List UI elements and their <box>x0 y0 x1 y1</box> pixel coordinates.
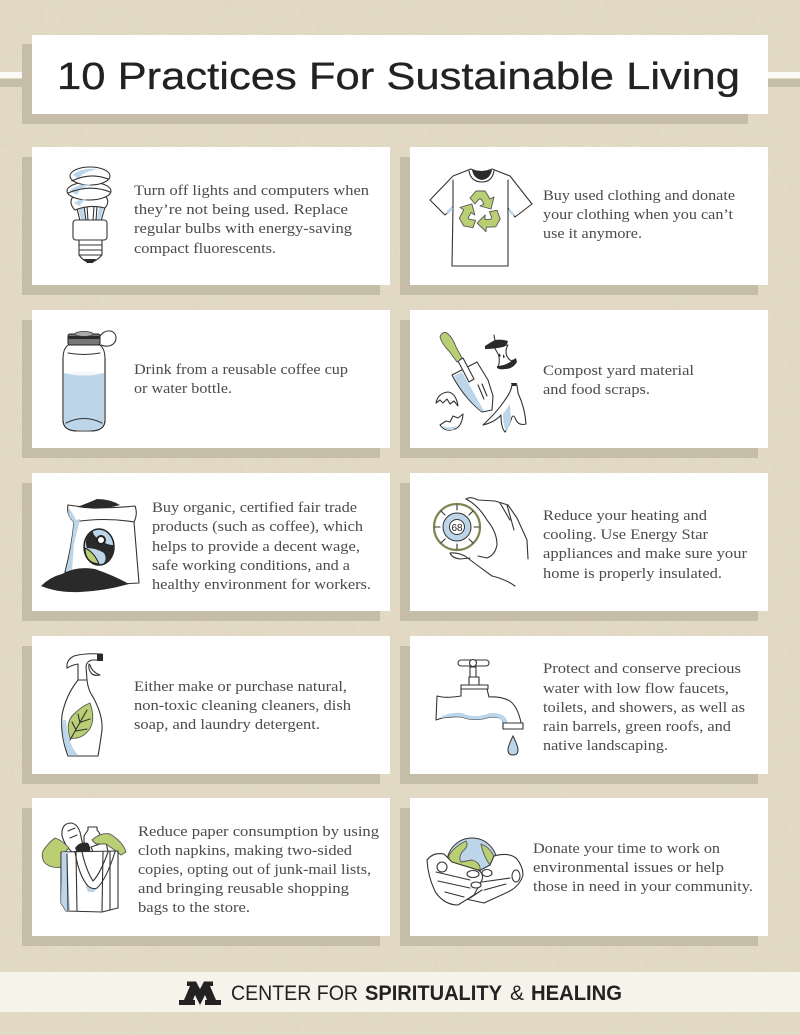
panel: reduce paper <box>22 798 390 946</box>
text: donate: environmental issues or help <box>533 860 724 876</box>
icon: fair trade coffee sack <box>41 499 139 592</box>
text: lights: compact fluorescents. <box>134 241 276 257</box>
panel: lights <box>22 147 390 295</box>
panel: organic fair trade <box>22 473 390 621</box>
icon: hand turning thermostat <box>434 498 528 586</box>
text: clothing: Buy used clothing and donate <box>543 188 735 204</box>
text: paper <box>138 824 380 916</box>
panel: heating and cooling <box>400 473 768 621</box>
text: paper: and bringing reusable shopping <box>138 881 350 897</box>
text: heating: cooling. Use Energy Star <box>543 527 708 543</box>
icon: hands holding earth <box>427 838 523 905</box>
text: paper: copies, opting out of junk-mail lists, <box>138 862 371 878</box>
text: lights <box>134 183 370 257</box>
text: water: toilets, and showers, as well as <box>543 700 745 716</box>
panel: natural cleaners <box>22 636 390 784</box>
text: compost: and food scraps. <box>543 382 650 398</box>
panel: reusable bottle <box>22 310 390 458</box>
icon: water bottle <box>63 331 116 431</box>
footer wordmark <box>231 982 622 1005</box>
text: organic fair trade: helps to provide a decent wage, <box>152 539 360 555</box>
text: heating <box>543 508 747 582</box>
text: organic fair trade: products (such as coffee), which <box>152 519 364 535</box>
footer wordmark: CENTER FOR <box>231 982 358 1005</box>
text: bottle: Drink from a reusable coffee cup <box>134 362 348 378</box>
icon: hand turning thermostat: 68 <box>451 523 463 534</box>
text: heating: home is properly insulated. <box>543 566 722 582</box>
panel: compost <box>400 310 768 458</box>
title: 10 Practices For Sustainable Living <box>57 56 740 98</box>
title banner <box>0 35 800 124</box>
text: donate: Donate your time to work on <box>533 841 721 857</box>
text: organic fair trade: safe working conditions, and a <box>152 558 350 574</box>
text: paper: cloth napkins, making two-sided <box>138 843 353 859</box>
text: water: native landscaping. <box>543 738 668 754</box>
text: lights: Turn off lights and computers when <box>134 183 370 199</box>
icon: spray bottle with leaf <box>62 654 103 756</box>
text: bottle: or water bottle. <box>134 381 232 397</box>
text: donate <box>533 841 753 895</box>
text: donate: those in need in your community. <box>533 879 753 895</box>
text: compost: Compost yard material <box>543 363 694 379</box>
text: lights: regular bulbs with energy-saving <box>134 221 353 237</box>
text: clothing: your clothing when you can’t <box>543 207 734 223</box>
text: cleaners: non-toxic cleaning cleaners, dish <box>134 698 352 714</box>
text: bottle <box>134 362 348 397</box>
text: organic fair trade: healthy environment for workers. <box>152 577 371 593</box>
icon: light bulb <box>67 167 111 263</box>
footer wordmark: & <box>510 982 524 1005</box>
footer band <box>0 972 800 1012</box>
text: water <box>543 661 745 754</box>
panel: water conservation <box>400 636 768 784</box>
panel: clothing <box>400 147 768 295</box>
text: heating: appliances and make sure your <box>543 546 747 562</box>
text: organic fair trade: Buy organic, certified fair trade <box>152 500 357 516</box>
text: water: rain barrels, green roofs, and <box>543 719 732 735</box>
text: cleaners: soap, and laundry detergent. <box>134 717 320 733</box>
text: clothing: use it anymore. <box>543 226 642 242</box>
text: organic fair trade <box>152 500 371 593</box>
footer wordmark: HEALING <box>531 982 622 1005</box>
panel: donate time <box>400 798 768 946</box>
icon: reusable grocery bag <box>42 823 126 912</box>
icon: recycling t-shirt <box>430 169 532 266</box>
text: water: Protect and conserve precious <box>543 661 741 677</box>
text: water: water with low flow faucets, <box>543 681 729 697</box>
footer wordmark: SPIRITUALITY <box>365 982 502 1005</box>
icon part: recycle symbol <box>455 191 503 235</box>
text: cleaners <box>134 679 352 733</box>
text: cleaners: Either make or purchase natural, <box>134 679 347 695</box>
text: clothing <box>543 188 735 242</box>
text: compost <box>543 363 694 398</box>
text: heating: Reduce your heating and <box>543 508 708 524</box>
text: paper: bags to the store. <box>138 900 250 916</box>
icon: trowel and food scraps <box>436 332 526 432</box>
icon: faucet with drop <box>436 660 523 755</box>
text: paper: Reduce paper consumption by using <box>138 824 380 840</box>
logo: block M <box>179 982 221 1005</box>
text: lights: they’re not being used. Replace <box>134 202 348 218</box>
